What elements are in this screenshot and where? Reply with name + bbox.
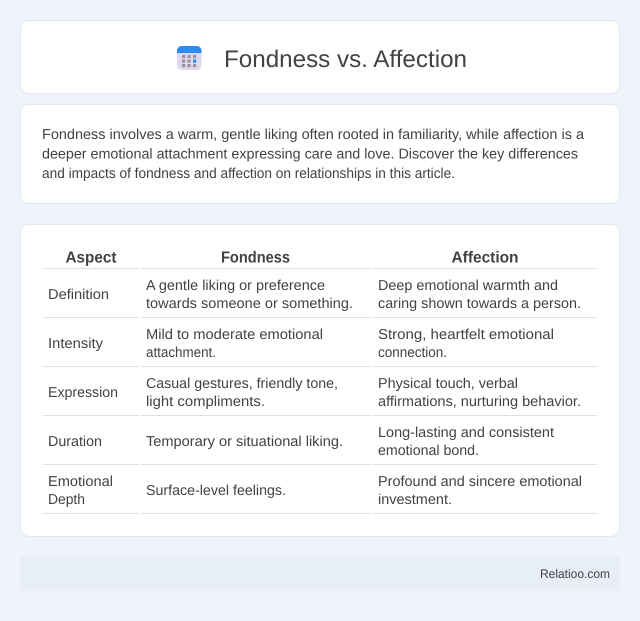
intro text: deeper emotional attachment expressing care and love. Discover the key differences <box>42 146 578 162</box>
row: definition: Definition <box>48 287 109 303</box>
row: intensity <box>48 327 554 361</box>
row: duration: Temporary or situational liking. <box>146 434 343 450</box>
row: definition: A gentle liking or preference <box>146 278 325 294</box>
row: definition: Deep emotional warmth and <box>378 278 558 294</box>
footer credit: Relatioo.com <box>540 567 610 581</box>
table header row: Aspect <box>66 250 117 266</box>
intro text <box>42 127 584 182</box>
icon: calendar <box>177 46 202 70</box>
row: emotional depth: Depth <box>48 492 85 508</box>
row: intensity: connection. <box>378 345 447 361</box>
row: definition <box>48 278 581 312</box>
row: emotional depth: Emotional <box>48 474 113 490</box>
title: Fondness vs. Affection <box>224 46 467 73</box>
row: definition: caring shown towards a person. <box>378 296 581 312</box>
panel: introduction <box>20 104 620 204</box>
row: emotional depth: Surface-level feelings. <box>146 483 286 499</box>
row: intensity: Strong, heartfelt emotional <box>378 327 554 343</box>
intro text: and impacts of fondness and affection on relationships in this article. <box>42 166 455 182</box>
footer bar <box>20 557 620 591</box>
row: emotional depth <box>48 474 582 508</box>
row: duration: Long-lasting and consistent <box>378 425 554 441</box>
table header row: Affection <box>452 250 518 266</box>
row: emotional depth: Profound and sincere emotional <box>378 474 582 490</box>
row: duration <box>48 425 554 459</box>
table header row: Fondness <box>221 250 290 266</box>
table header row <box>66 250 518 266</box>
row: emotional depth: investment. <box>378 492 452 508</box>
row: expression: Expression <box>48 385 118 401</box>
row: expression: Physical touch, verbal <box>378 376 518 392</box>
row: expression: affirmations, nurturing behavior. <box>378 394 581 410</box>
row: intensity: Intensity <box>48 336 104 352</box>
panel: comparison table <box>20 224 620 536</box>
row: intensity: Mild to moderate emotional <box>146 327 323 343</box>
row: duration: emotional bond. <box>378 443 479 459</box>
row: intensity: attachment. <box>146 345 216 361</box>
row: expression <box>48 376 581 410</box>
panel: title header <box>20 20 620 94</box>
intro text: Fondness involves a warm, gentle liking often rooted in familiarity, while affection is a <box>42 127 584 143</box>
row: definition: towards someone or something. <box>146 296 353 312</box>
row: duration: Duration <box>48 434 102 450</box>
row: expression: light compliments. <box>146 394 265 410</box>
row: expression: Casual gestures, friendly tone, <box>146 376 338 392</box>
